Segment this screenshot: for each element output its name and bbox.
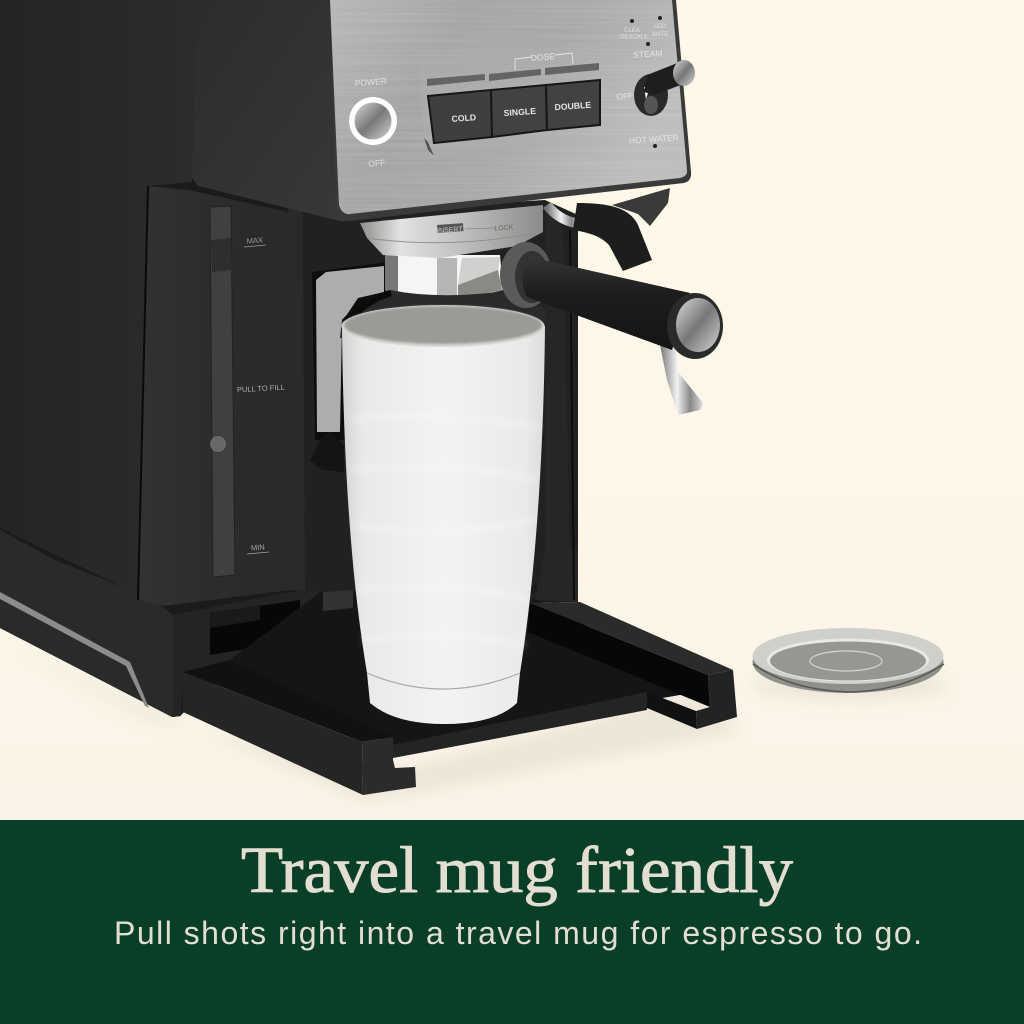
steam lever [634,60,695,116]
dose bracket label [515,51,573,70]
tray floor [230,590,708,745]
off label: OFF [616,90,634,102]
status lights: CLEA [624,28,640,34]
espresso machine [0,0,737,795]
power button: POWER [354,76,387,88]
steam pipe and bracket [547,188,670,271]
dose bracket label: DOSE [530,51,555,63]
power button [349,76,397,169]
insert lock label: LOCK [494,224,514,233]
single button: SINGLE [503,106,536,118]
dose indicator bars [427,63,599,86]
travel mug [342,305,545,724]
status lights: ADD [654,24,667,30]
steam wand [500,242,723,415]
status lights [620,16,668,46]
green caption banner [0,820,1024,1024]
machine base [0,530,323,717]
min label [247,543,269,554]
machine dark backing [0,0,708,745]
water tank [138,186,290,606]
clear travel mug lid [752,628,944,693]
group head collar [360,205,543,258]
brew cavity [288,200,578,611]
drip tray rails [183,602,737,795]
max label: MAX [246,235,263,246]
machine head left face [192,0,345,222]
right rail [528,602,737,729]
cold button: COLD [451,112,476,124]
brew buttons [428,80,600,143]
cold button [428,90,492,143]
insert lock label: INSERT [437,226,464,235]
single button [491,85,547,137]
wand collar ring [500,242,552,308]
double button: DOUBLE [554,100,592,112]
hot water label: HOT WATER [629,132,679,146]
portafilter [340,255,545,340]
steam label: STEAM [633,48,663,60]
power button: OFF [368,157,386,169]
left rail [183,660,416,795]
stainless control panel [325,0,695,225]
water window [210,206,235,577]
wand handle [523,257,690,350]
wand end cap [667,293,723,359]
status lights: DESCALE [620,34,648,40]
subheading: Pull shots right into a travel mug for espresso to go. [114,915,922,951]
tray front lip [393,692,647,758]
max label [244,235,266,247]
min label: MIN [251,543,265,552]
pull to fill label: PULL TO FILL [237,383,285,394]
status lights: WATE [652,32,668,38]
double button [546,80,600,130]
wand tip [660,345,703,415]
insert lock label [437,223,514,235]
floor shadows [0,640,948,800]
headline: Travel mug friendly [241,834,793,907]
machine left side body [0,0,196,594]
